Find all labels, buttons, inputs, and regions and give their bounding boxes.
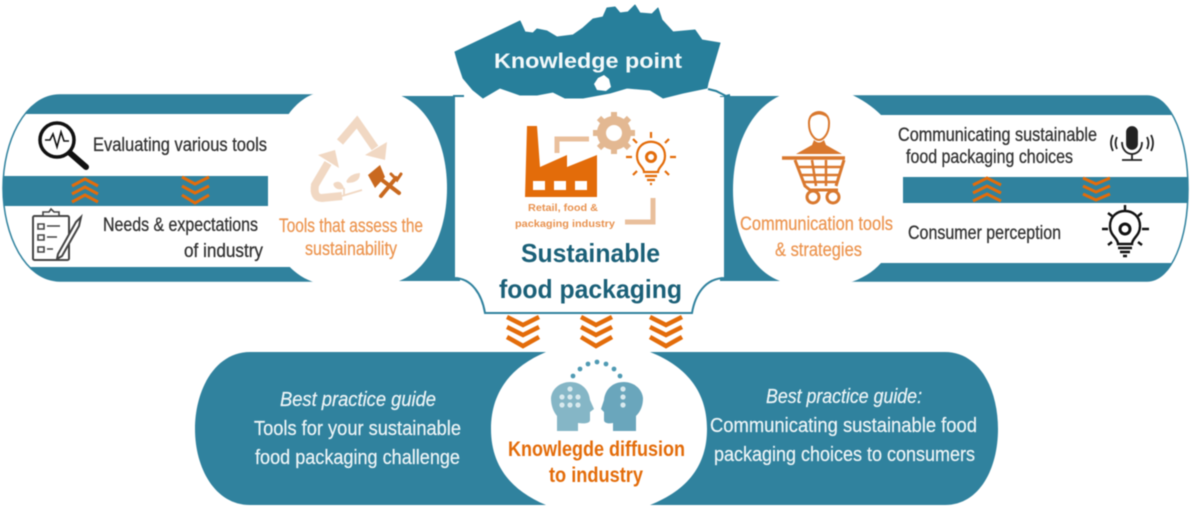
text: evaluating various tools: Evaluating various tools (93, 135, 267, 156)
panel: best practice guide communication: Best practice guide: (766, 386, 922, 408)
icon: magnifier (40, 123, 86, 167)
heading: sustainable food packaging: food packaging (499, 274, 682, 304)
icon: chevrons down left (507, 317, 539, 346)
icon: up chevrons (72, 179, 98, 202)
heading: knowledge point map (455, 5, 730, 98)
panel: tools assessment (left) (0, 93, 460, 283)
heading: knowledge point map: Knowledge point (494, 49, 682, 73)
text: knowledge diffusion to industry (508, 438, 685, 487)
text: knowledge diffusion to industry: to industry (549, 464, 643, 487)
icon: clipboard checklist (33, 209, 81, 260)
panel: best practice guide tools: food packaging challenge (255, 447, 460, 469)
connector: bulb to label (625, 198, 653, 222)
text: communicating sustainable food packaging choices: food packaging choices (906, 147, 1073, 168)
icon: person in shopping cart (782, 112, 845, 203)
icon: microphone (1111, 127, 1153, 160)
text: retail, food and packaging industry (515, 202, 615, 230)
text: communication tools and strategies: Communication tools (740, 214, 893, 235)
text: communicating sustainable food packaging choices (898, 125, 1097, 168)
icon: orange light bulb (626, 132, 676, 184)
text: needs and expectations of industry: of industry (184, 241, 263, 262)
icon: down chevrons (1083, 178, 1110, 200)
text: consumer perception: Consumer perception (908, 223, 1061, 244)
icon: light bulb (1102, 205, 1149, 256)
panel: best practice guide tools (195, 352, 546, 505)
icon: down chevrons (182, 177, 209, 203)
text: needs and expectations of industry (103, 215, 263, 262)
icon: chevrons down centre (581, 317, 612, 346)
panel: central sustainable food packaging box (454, 95, 725, 313)
panel: best practice guide communication (650, 352, 998, 505)
text: knowledge diffusion to industry: Knowlegde diffusion (508, 438, 685, 461)
connector: factory to gear (557, 139, 589, 153)
text: tools that assess the sustainability: sustainability (305, 239, 397, 260)
panel: communication tools (right) (720, 93, 1200, 283)
panel: best practice guide tools: Tools for your sustainable (254, 418, 461, 440)
text: communication tools and strategies (740, 214, 893, 261)
heading: sustainable food packaging (499, 238, 682, 304)
icon: up chevrons (973, 178, 1001, 201)
icon: two heads sharing knowledge (551, 360, 643, 431)
icon: recycling arrows with plant and tools (315, 122, 401, 198)
panel: best practice guide communication: Communicating sustainable food (710, 415, 977, 437)
icon: factory (525, 126, 597, 197)
text: retail, food and packaging industry: Retail, food & (528, 202, 598, 214)
panel: best practice guide communication: packaging choices to consumers (714, 444, 975, 466)
heading: sustainable food packaging: Sustainable (521, 238, 660, 268)
text: communicating sustainable food packaging choices: Communicating sustainable (898, 125, 1097, 146)
text: communication tools and strategies: & strategies (775, 240, 862, 261)
icon: gear (593, 112, 635, 154)
icon: chevrons down right (650, 317, 682, 346)
text: retail, food and packaging industry: packaging industry (515, 218, 615, 230)
text: needs and expectations of industry: Needs & expectations (103, 215, 258, 236)
panel: best practice guide tools: Best practice guide (280, 389, 436, 411)
text: tools that assess the sustainability: Tools that assess the (279, 216, 423, 237)
text: tools that assess the sustainability (279, 216, 423, 260)
